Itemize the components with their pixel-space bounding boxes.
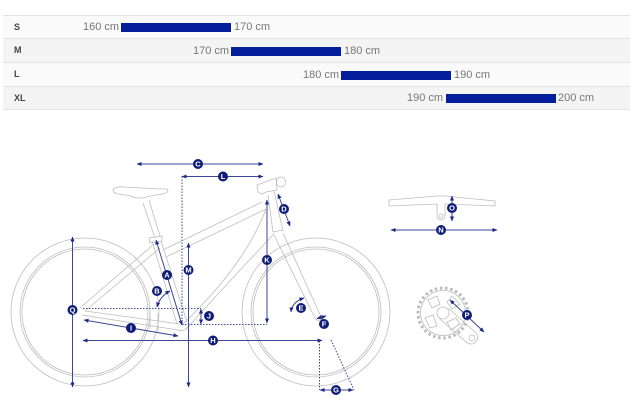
dimension A (156, 240, 182, 325)
dimension G (320, 340, 354, 395)
dimension B (152, 286, 170, 307)
XL range bar: 190 cm (407, 92, 443, 104)
M range bar: 180 cm (344, 45, 380, 57)
M range bar: 170 cm (193, 45, 229, 57)
rear wheel (11, 238, 159, 386)
dimension C: C (195, 160, 201, 169)
dimension E: E (298, 304, 304, 313)
row: size S (3, 15, 630, 39)
M range bar (193, 45, 380, 57)
dimension E (291, 298, 306, 313)
dimension F (317, 316, 329, 329)
dimension Q (68, 237, 78, 387)
dimension N: N (438, 226, 444, 235)
dimension M (184, 243, 194, 387)
row: size XL: XL (14, 93, 26, 103)
dimension M: M (185, 266, 192, 275)
dimension L: L (221, 172, 226, 181)
dimension I (84, 320, 178, 336)
dimension P: P (464, 311, 470, 320)
row: size L (3, 62, 630, 86)
chainring and crank detail (418, 288, 478, 344)
L range bar: 190 cm (454, 69, 490, 81)
dimension D (278, 194, 290, 226)
dimension D: D (281, 205, 287, 214)
L range bar: 180 cm (303, 69, 339, 81)
row: size M (3, 38, 630, 62)
L range bar (303, 69, 490, 81)
frame (80, 191, 322, 331)
row: size L: L (14, 69, 20, 79)
dimension J: J (207, 312, 211, 321)
dimension H: H (210, 336, 216, 345)
dimension O: O (449, 204, 455, 213)
S range bar: 170 cm (234, 21, 270, 33)
dimension K: K (264, 256, 270, 265)
seatpost and saddle (113, 187, 168, 238)
dimension J (83, 308, 267, 324)
dimension P (450, 300, 484, 332)
handlebar detail (389, 196, 495, 220)
stem (257, 177, 286, 194)
row: size XL (3, 86, 630, 110)
dimension O (447, 196, 457, 221)
dimension F: F (322, 320, 327, 329)
S range bar (83, 21, 270, 33)
size table (3, 15, 630, 110)
dimension L (182, 172, 263, 325)
front wheel (242, 238, 390, 386)
row: size S: S (14, 22, 20, 32)
dimension Q: Q (70, 306, 76, 315)
dimension I: I (130, 324, 132, 333)
dimension K (262, 200, 272, 323)
S range bar: 160 cm (83, 21, 119, 33)
XL range bar (407, 92, 594, 104)
dimension G: G (333, 386, 339, 395)
dimension N (391, 225, 497, 235)
row: size M: M (14, 45, 22, 55)
dimension H (83, 336, 322, 346)
XL range bar: 200 cm (558, 92, 594, 104)
dimension C (137, 159, 263, 169)
dimension B: B (154, 287, 160, 296)
dimension A: A (164, 271, 170, 280)
